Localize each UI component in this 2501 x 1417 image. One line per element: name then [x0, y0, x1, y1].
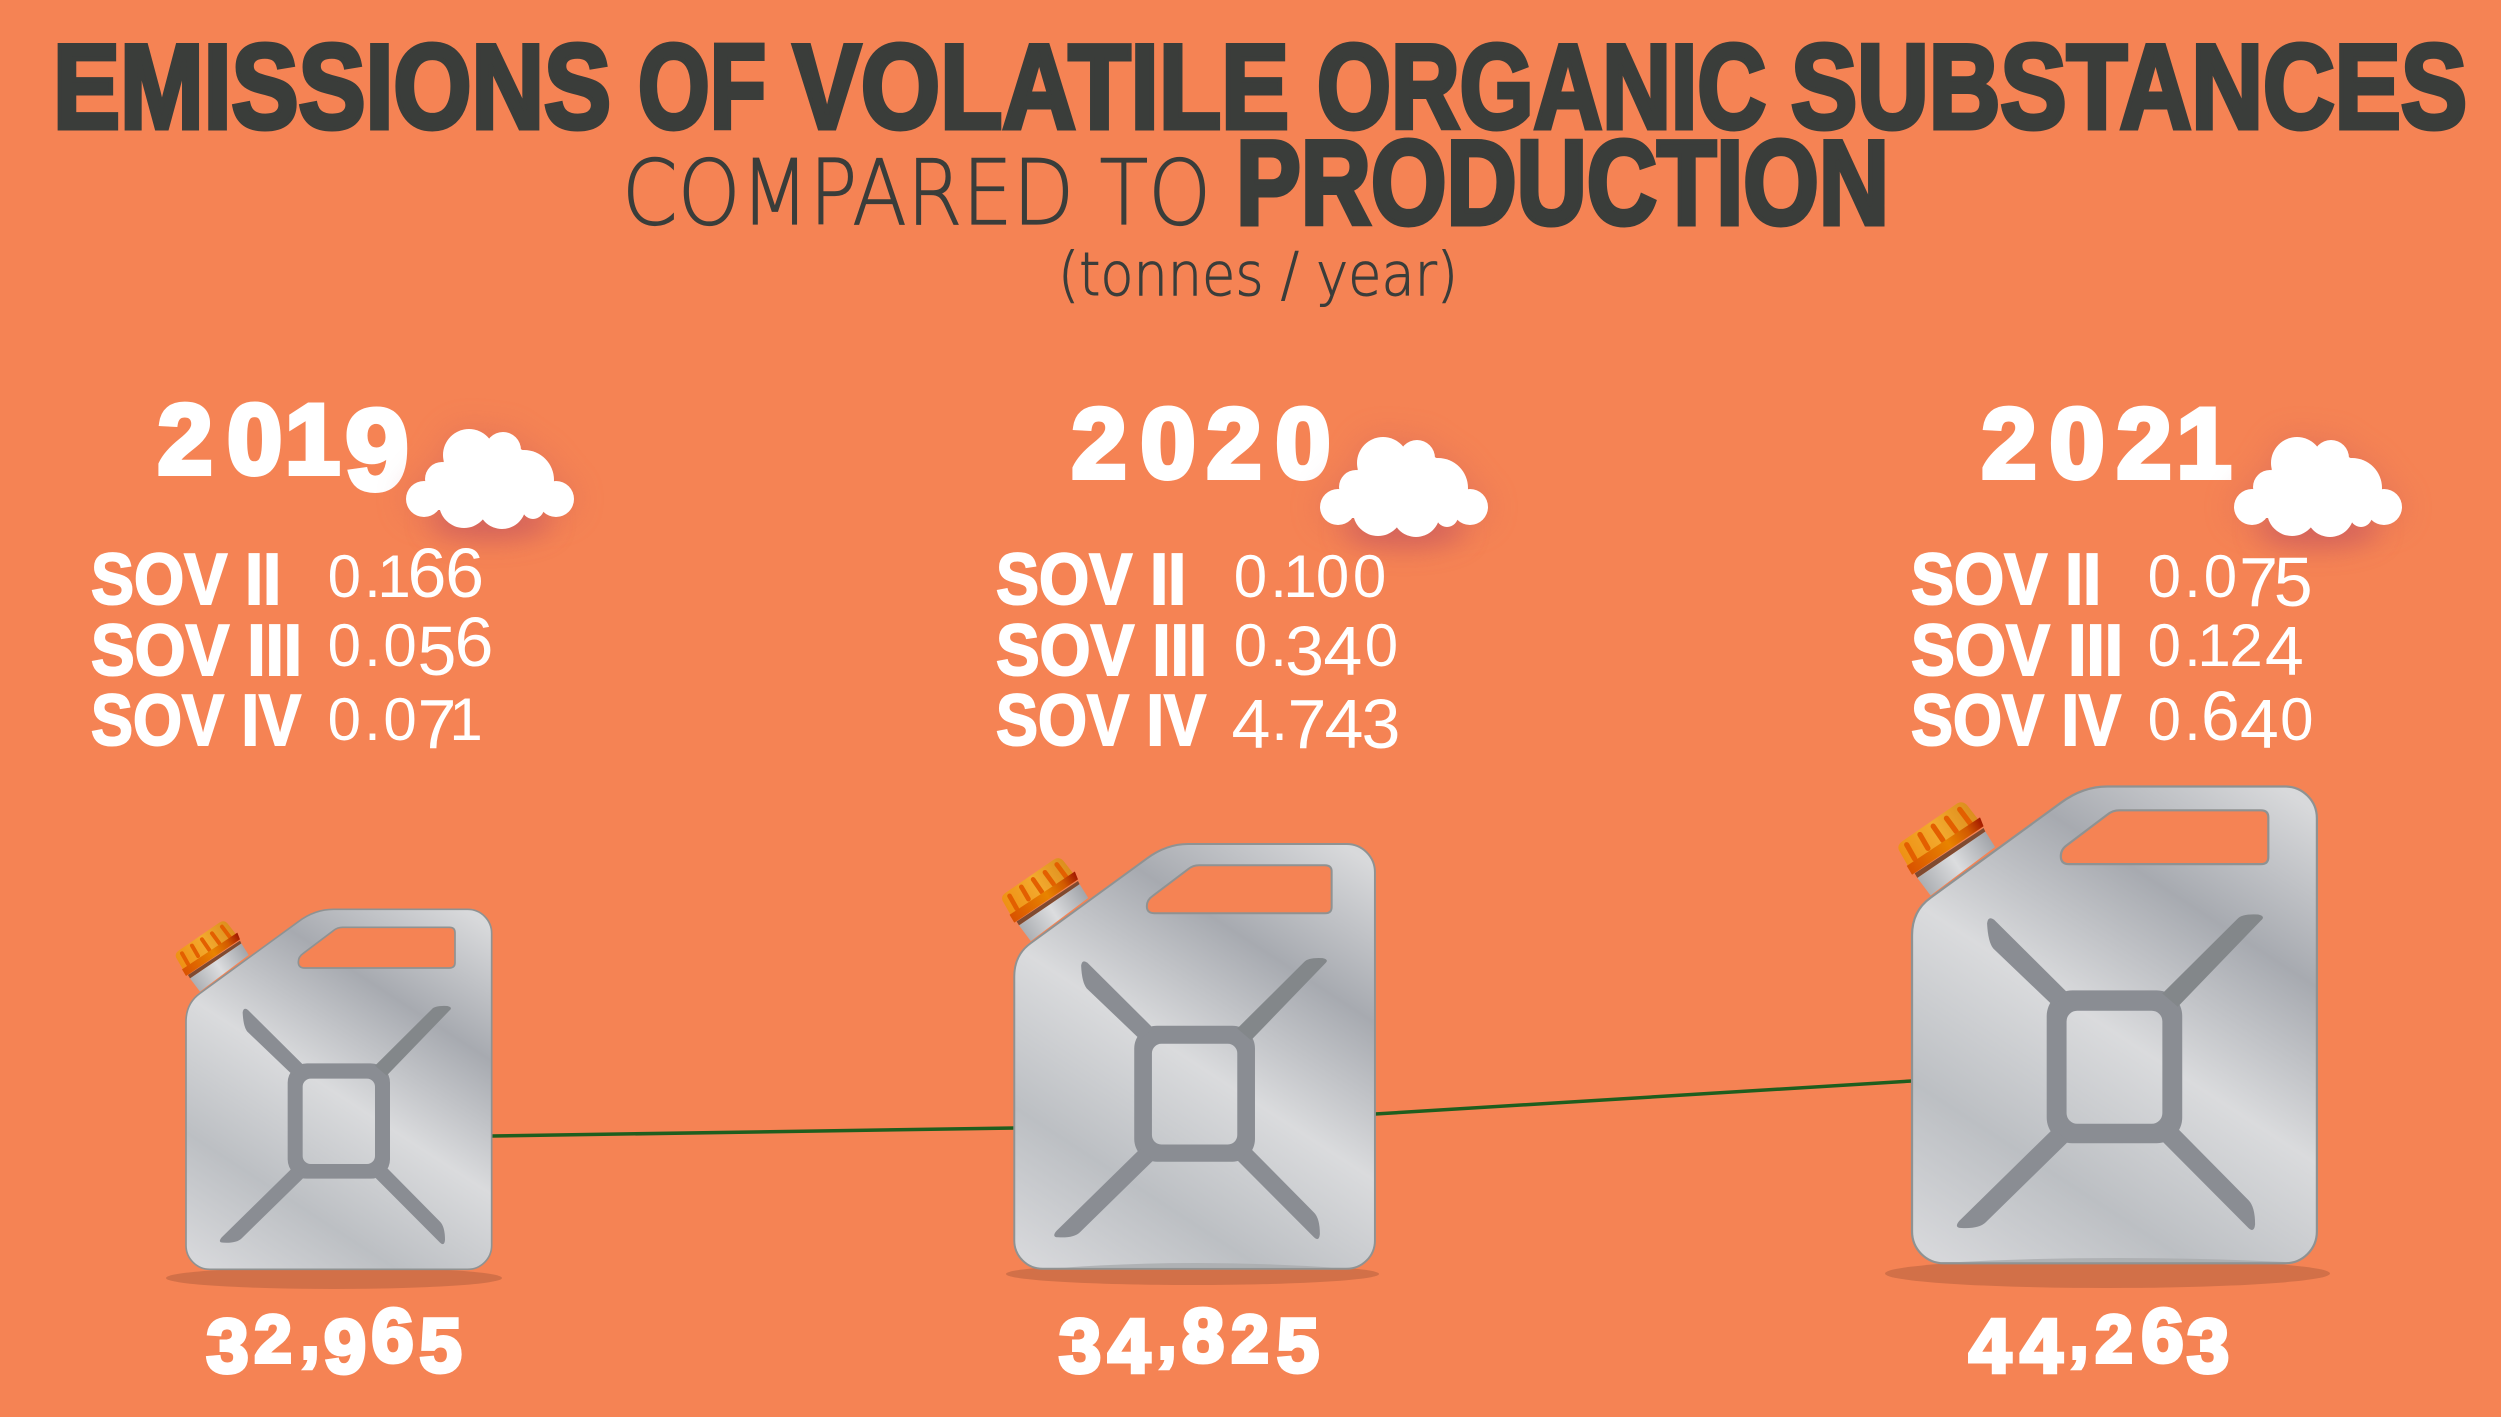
- SOV values: 3: [1362, 685, 1400, 763]
- SOV values: 4: [2240, 685, 2279, 763]
- panel: 2020: [996, 388, 1488, 1389]
- SOV values: 0: [2148, 686, 2181, 753]
- SOV labels: SOV II: [1911, 540, 2101, 620]
- SOV values: 1: [2197, 612, 2231, 679]
- SOV values: 7: [2239, 543, 2278, 621]
- SOV values: .: [2184, 686, 2201, 753]
- SOV values: 4: [1232, 685, 1270, 763]
- SOV labels: SOV III: [996, 611, 1207, 691]
- total 2019: 5: [420, 1304, 462, 1389]
- total 2020: 2: [1231, 1302, 1269, 1377]
- title: EMISSIONS: [53, 20, 611, 154]
- SOV values: [1232, 543, 1400, 763]
- total 2019: 3: [206, 1304, 249, 1389]
- SOV values: .: [1270, 543, 1287, 610]
- SOV values: 0: [1234, 612, 1267, 679]
- title: ORGANIC: [1317, 20, 1766, 154]
- SOV values: .: [1271, 686, 1288, 753]
- SOV values: 0: [328, 612, 361, 679]
- total 2020: 5: [1277, 1304, 1319, 1389]
- unit note: (tonnes / year): [1058, 240, 1458, 310]
- panel: 2021: [1885, 388, 2402, 1389]
- total 2020: 8: [1182, 1294, 1224, 1379]
- SOV values: 0: [1353, 543, 1386, 610]
- SOV values: 6: [408, 534, 446, 612]
- SOV values: 6: [445, 534, 484, 612]
- total 2019: 9: [324, 1305, 366, 1390]
- SOV values: .: [364, 543, 381, 610]
- SOV values: .: [2184, 543, 2201, 610]
- total 2019: 6: [371, 1294, 414, 1379]
- title: VOLATILE: [793, 20, 1289, 154]
- SOV values: 0: [1365, 612, 1398, 679]
- year 2021: 2: [2116, 388, 2172, 498]
- trend line: [492, 1081, 1912, 1136]
- SOV values: 0: [2204, 543, 2237, 610]
- shadow under can: [1885, 1259, 2330, 1288]
- total 2021: 6: [2141, 1294, 2184, 1379]
- icon: cloud: [406, 429, 574, 540]
- SOV values: .: [364, 686, 381, 753]
- total 2021: 2: [2095, 1302, 2133, 1377]
- SOV labels: SOV II: [996, 540, 1186, 620]
- SOV labels: SOV IV: [1911, 681, 2121, 761]
- icon: jerrycan: [1002, 844, 1375, 1269]
- icon: jerrycan: [1898, 786, 2317, 1263]
- total 2020: 4: [1108, 1304, 1150, 1389]
- SOV values: 2: [2229, 612, 2263, 679]
- SOV labels: SOV III: [1911, 611, 2123, 691]
- shadow under can: [166, 1267, 502, 1289]
- SOV labels: [996, 540, 1207, 761]
- icon: jerrycan: [176, 909, 492, 1269]
- SOV values: 4: [2265, 612, 2304, 690]
- SOV labels: SOV IV: [996, 681, 1206, 761]
- SOV values: 7: [1288, 685, 1326, 763]
- SOV values: 3: [1285, 612, 1324, 690]
- SOV values: 0: [328, 686, 361, 753]
- year 2020: 0: [1140, 388, 1196, 498]
- SOV labels: [91, 540, 302, 761]
- SOV values: 5: [2274, 543, 2313, 621]
- SOV values: 7: [418, 685, 456, 763]
- total 2019: ,: [301, 1298, 319, 1373]
- total 2020: ,: [1158, 1298, 1176, 1373]
- icon: cloud: [1320, 437, 1488, 548]
- SOV values: .: [364, 612, 381, 679]
- subtitle: compared to production: [622, 116, 1889, 250]
- SOV values: 0: [2148, 543, 2181, 610]
- year 2020: 2: [1071, 388, 1127, 498]
- SOV values: 0: [1316, 543, 1349, 610]
- panel: 2019: [91, 384, 574, 1390]
- SOV values: 0: [2148, 612, 2181, 679]
- SOV values: 0: [328, 543, 361, 610]
- total 2021: 4: [1969, 1304, 2011, 1389]
- SOV labels: SOV II: [91, 540, 281, 620]
- SOV values: 1: [1283, 543, 1317, 610]
- SOV values: 1: [377, 543, 411, 610]
- year 2020: 0: [1275, 388, 1331, 498]
- total 2021: ,: [2070, 1298, 2088, 1373]
- year 2019: 2: [157, 384, 213, 494]
- total 2021: 3: [2187, 1304, 2229, 1389]
- SOV values: [328, 534, 493, 763]
- year 2019: 1: [285, 384, 340, 494]
- subtitle: compared to production: PRODUCTION: [1236, 116, 1889, 250]
- year 2021: 2: [1981, 388, 2037, 498]
- year 2019: 0: [227, 384, 282, 494]
- SOV values: 5: [418, 612, 456, 690]
- SOV values: 0: [1234, 543, 1267, 610]
- SOV values: 4: [1323, 612, 1362, 690]
- year 2020: 2: [1206, 388, 1262, 498]
- SOV labels: SOV IV: [91, 681, 301, 761]
- SOV values: 6: [455, 603, 493, 681]
- title: OF: [638, 20, 766, 154]
- year 2021: 0: [2049, 388, 2105, 498]
- year 2021: 1: [2176, 388, 2232, 498]
- SOV values: 0: [383, 686, 417, 753]
- year 2019: 9: [345, 386, 409, 514]
- SOV values: 4: [1325, 685, 1363, 763]
- SOV values: 0: [383, 612, 417, 679]
- SOV values: 0: [2280, 686, 2313, 753]
- SOV values: 1: [449, 686, 483, 753]
- SOV values: 6: [2201, 677, 2240, 755]
- total 2019: 2: [254, 1302, 292, 1377]
- subtitle: compared to production: COMPARED TO: [622, 141, 1211, 246]
- SOV values: .: [1270, 612, 1287, 679]
- SOV labels: SOV III: [91, 611, 302, 691]
- total 2020: 3: [1059, 1304, 1101, 1389]
- icon: cloud: [2234, 437, 2402, 548]
- SOV values: [2148, 543, 2313, 763]
- shadow under can: [1006, 1263, 1379, 1285]
- SOV values: .: [2184, 612, 2201, 679]
- title: [53, 20, 2467, 154]
- total 2021: 4: [2020, 1304, 2063, 1389]
- SOV labels: [1911, 540, 2123, 761]
